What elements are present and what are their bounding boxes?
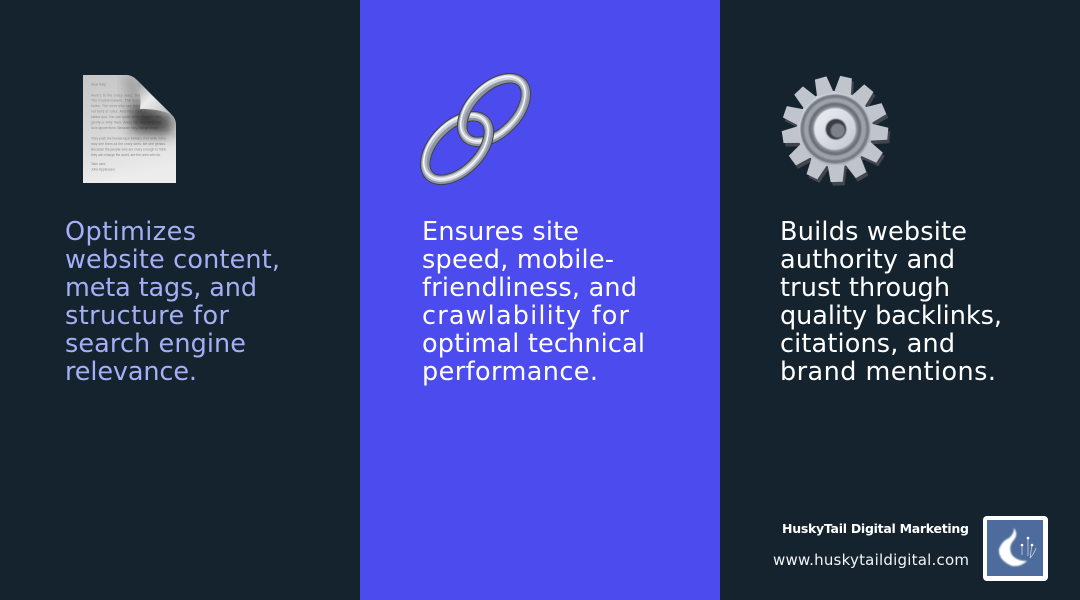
icon: gear <box>771 66 901 196</box>
icon: document: status quo. You can quote them, disagree with <box>91 115 161 119</box>
text: on-page description: Optimizes <box>65 217 196 247</box>
text: technical description: crawlability for <box>422 301 630 331</box>
text: off-page description: trust through <box>780 273 950 303</box>
text: on-page description: meta tags, and <box>65 273 257 303</box>
text: off-page description: citations, and <box>780 329 955 359</box>
icon: document: holes. The ones who see things differently. <box>91 104 161 108</box>
text: on-page description: website content, <box>65 245 280 275</box>
icon: document: they can change the world, are the ones who do. <box>91 153 161 157</box>
text: off-page description: Builds website <box>780 217 967 247</box>
icon: document: They push the human race forward. And while some <box>91 136 166 140</box>
text: technical description: friendliness, and <box>422 273 637 303</box>
text: on-page description: search engine <box>65 329 246 359</box>
icon: document: The troublemakers. The round pegs in the <box>91 98 161 102</box>
logo <box>983 516 1048 581</box>
icon: document <box>83 75 176 183</box>
brand name: HuskyTail Digital Marketing <box>782 521 969 536</box>
panel: on-page SEO <box>65 75 280 387</box>
icon: document: not fond of rules. And they have no respect <box>91 110 161 114</box>
icon: document: John Appleseed <box>91 168 115 172</box>
panel: technical SEO <box>412 65 645 387</box>
icon: document: Here's to the crazy ones. The misfits. The <box>91 94 161 98</box>
text: off-page description: authority and <box>780 245 955 275</box>
icon: document: glorify or vilify them. About the only thing you <box>91 120 161 124</box>
icon: document: Because the people who are crazy enough to think <box>91 148 166 152</box>
text: on-page description: relevance. <box>65 357 197 387</box>
text: technical description: optimal technical <box>422 329 645 359</box>
icon: document: Dear Katy, <box>91 82 106 86</box>
footer: brand <box>773 516 1048 581</box>
text: off-page description: quality backlinks, <box>780 301 1002 331</box>
text: technical description: performance. <box>422 357 598 387</box>
website url: www.huskytaildigital.com <box>773 551 969 569</box>
panel: off-page SEO <box>771 66 1002 387</box>
text: off-page description <box>780 217 1002 387</box>
text: on-page description: structure for <box>65 301 230 331</box>
center panel background <box>360 0 720 600</box>
icon: document: may see them as the crazy ones, we see genius. <box>91 142 166 146</box>
text: technical description: speed, mobile- <box>422 245 614 275</box>
text: technical description: Ensures site <box>422 217 579 247</box>
text: technical description <box>422 217 645 387</box>
icon: document: Take care, <box>91 162 106 166</box>
text: off-page description: brand mentions. <box>780 357 996 387</box>
icon: document: do is ignore them. Because they change things. <box>91 126 159 130</box>
icon: chain link <box>420 72 532 186</box>
text: on-page description <box>65 217 280 387</box>
